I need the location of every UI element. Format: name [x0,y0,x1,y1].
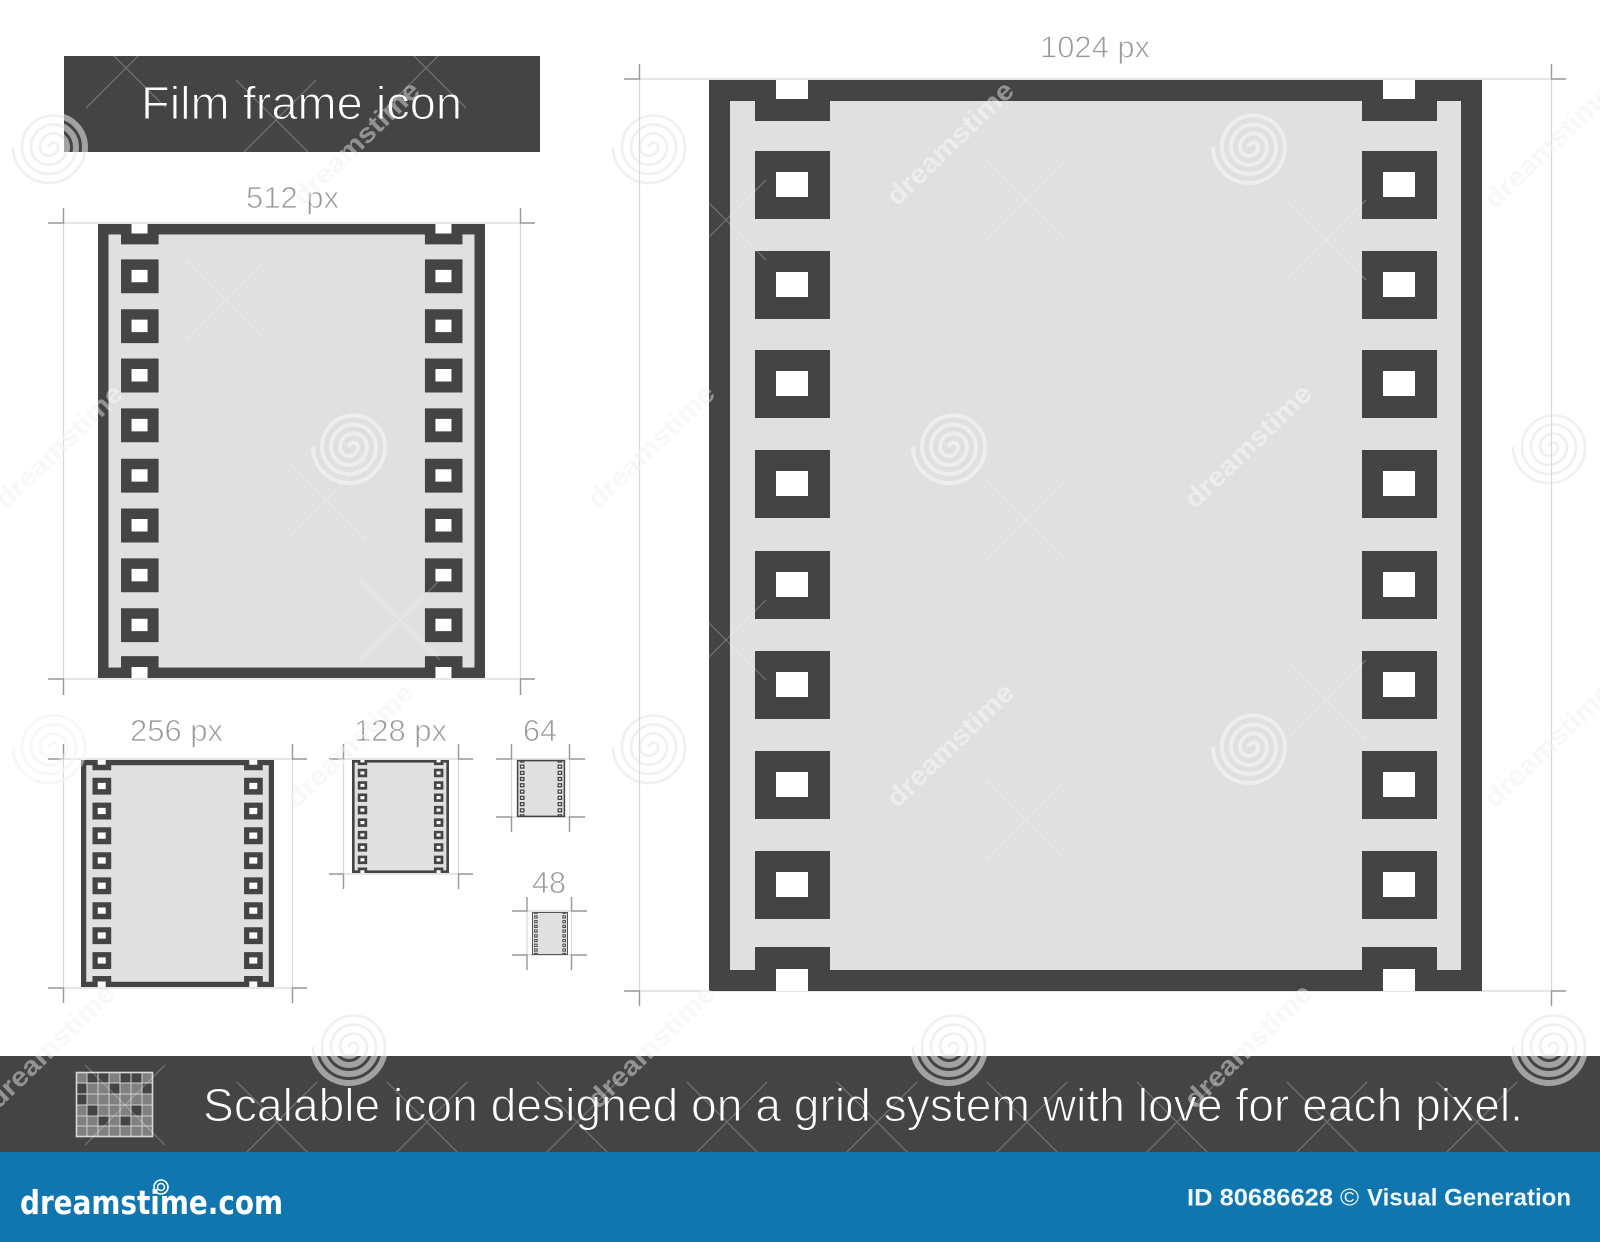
footer blue bar [0,1152,1600,1242]
guides: 512 px [48,208,535,695]
watermark: overlay lines, spirals and wordmarks: dreamstime [581,978,721,1114]
icon: film frame 1024 px [709,80,1482,991]
icon: film frame 64 [517,760,565,817]
guides: 256 px [48,744,307,1003]
watermark: faint spirals and wordmarks on white: dreamstime [286,75,426,211]
icon: film frame 256 px [81,760,274,987]
watermark: faint spirals and wordmarks on white: dreamstime [581,378,721,514]
size label: 512 px: 512 px [246,180,339,215]
watermark: overlay lines, spirals and wordmarks: dreamstime [1178,978,1318,1114]
title bar: Film frame icon [141,77,462,129]
guides: 48 [512,897,587,970]
logo: dreamstime.com: dreamstime.com [20,1183,283,1222]
watermark: overlay lines, spirals and wordmarks: dreamstime [880,75,1020,211]
guides: 128 px [329,744,473,889]
watermark: faint spirals and wordmarks on white: dreamstime [280,677,420,813]
image id and credit [1187,1184,1571,1212]
size label: 256 px: 256 px [130,713,223,748]
title bar [64,56,540,152]
icon: film frame 48 [532,912,568,955]
icon: film frame 512 px [98,224,485,678]
icon: pixel grid [76,1072,153,1137]
icon: film frame 128 px [352,760,449,873]
watermark: overlay lines, spirals and wordmarks: dreamstime [286,75,426,211]
size label: 64: 64 [523,713,557,748]
size label: 48: 48 [532,865,566,900]
size label: 128 px: 128 px [354,713,447,748]
image id and credit: Visual Generation [1367,1184,1571,1212]
guides: 64 [496,744,585,832]
watermark: overlay lines, spirals and wordmarks: dreamstime [280,677,420,813]
watermark: faint spirals and wordmarks on white: dreamstime [1178,978,1318,1114]
watermark: overlay lines, spirals and wordmarks: dreamstime [880,677,1020,813]
image id and credit: ID 80686628 [1187,1184,1333,1212]
bottom grey banner [0,1056,1600,1152]
size label: 1024 px: 1024 px [1040,30,1150,64]
image id and credit: © [1340,1184,1359,1212]
watermark: overlay lines, spirals and wordmarks: dreamstime [581,378,721,514]
watermark: faint spirals and wordmarks on white: dreamstime [581,978,721,1114]
banner text: Scalable icon designed on a grid system with love for each pixel. [203,1079,1523,1131]
watermark: overlay lines, spirals and wordmarks: dreamstime [1178,378,1318,514]
guides: 1024 px [624,64,1566,1006]
